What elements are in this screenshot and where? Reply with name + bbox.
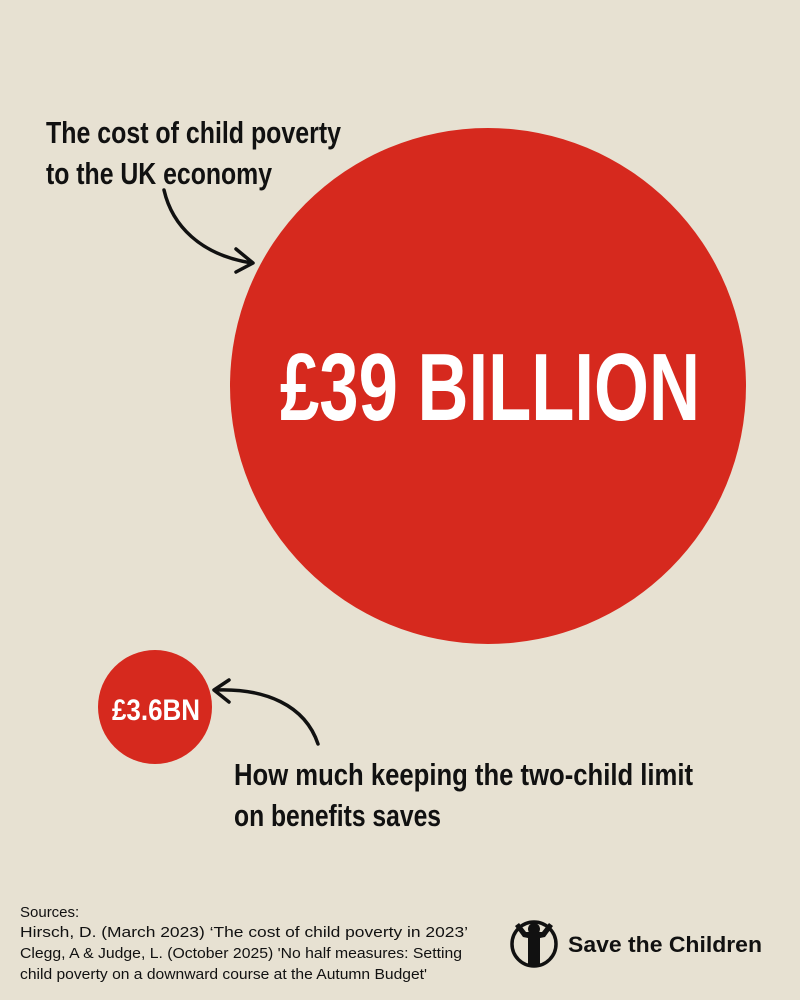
logo: Save the Children: Save the Children xyxy=(568,932,762,957)
title: cost of child poverty: The cost of child poverty xyxy=(46,115,342,150)
logo: Save the Children xyxy=(512,922,762,966)
sources: Hirsch, D. (March 2023) ‘The cost of child poverty in 2023’ xyxy=(20,924,468,941)
title: cost of child poverty xyxy=(46,115,342,191)
title: cost of child poverty: to the UK economy xyxy=(46,156,273,191)
small circle: £3.6BN: £3.6BN xyxy=(112,694,200,727)
caption: two-child limit: How much keeping the two-child limit xyxy=(234,757,693,792)
arrow: title to big circle xyxy=(164,190,253,272)
caption: two-child limit xyxy=(234,757,693,833)
caption: two-child limit: on benefits saves xyxy=(234,798,441,833)
sources: Sources: xyxy=(20,904,79,921)
sources xyxy=(20,904,468,983)
sources: Clegg, A & Judge, L. (October 2025) 'No half measures: Setting xyxy=(20,945,462,962)
arrow: caption to small circle xyxy=(214,680,318,744)
small circle: £3.6BN xyxy=(98,650,212,764)
icon: child emblem xyxy=(512,922,556,966)
sources: child poverty on a downward course at the Autumn Budget' xyxy=(20,966,427,983)
